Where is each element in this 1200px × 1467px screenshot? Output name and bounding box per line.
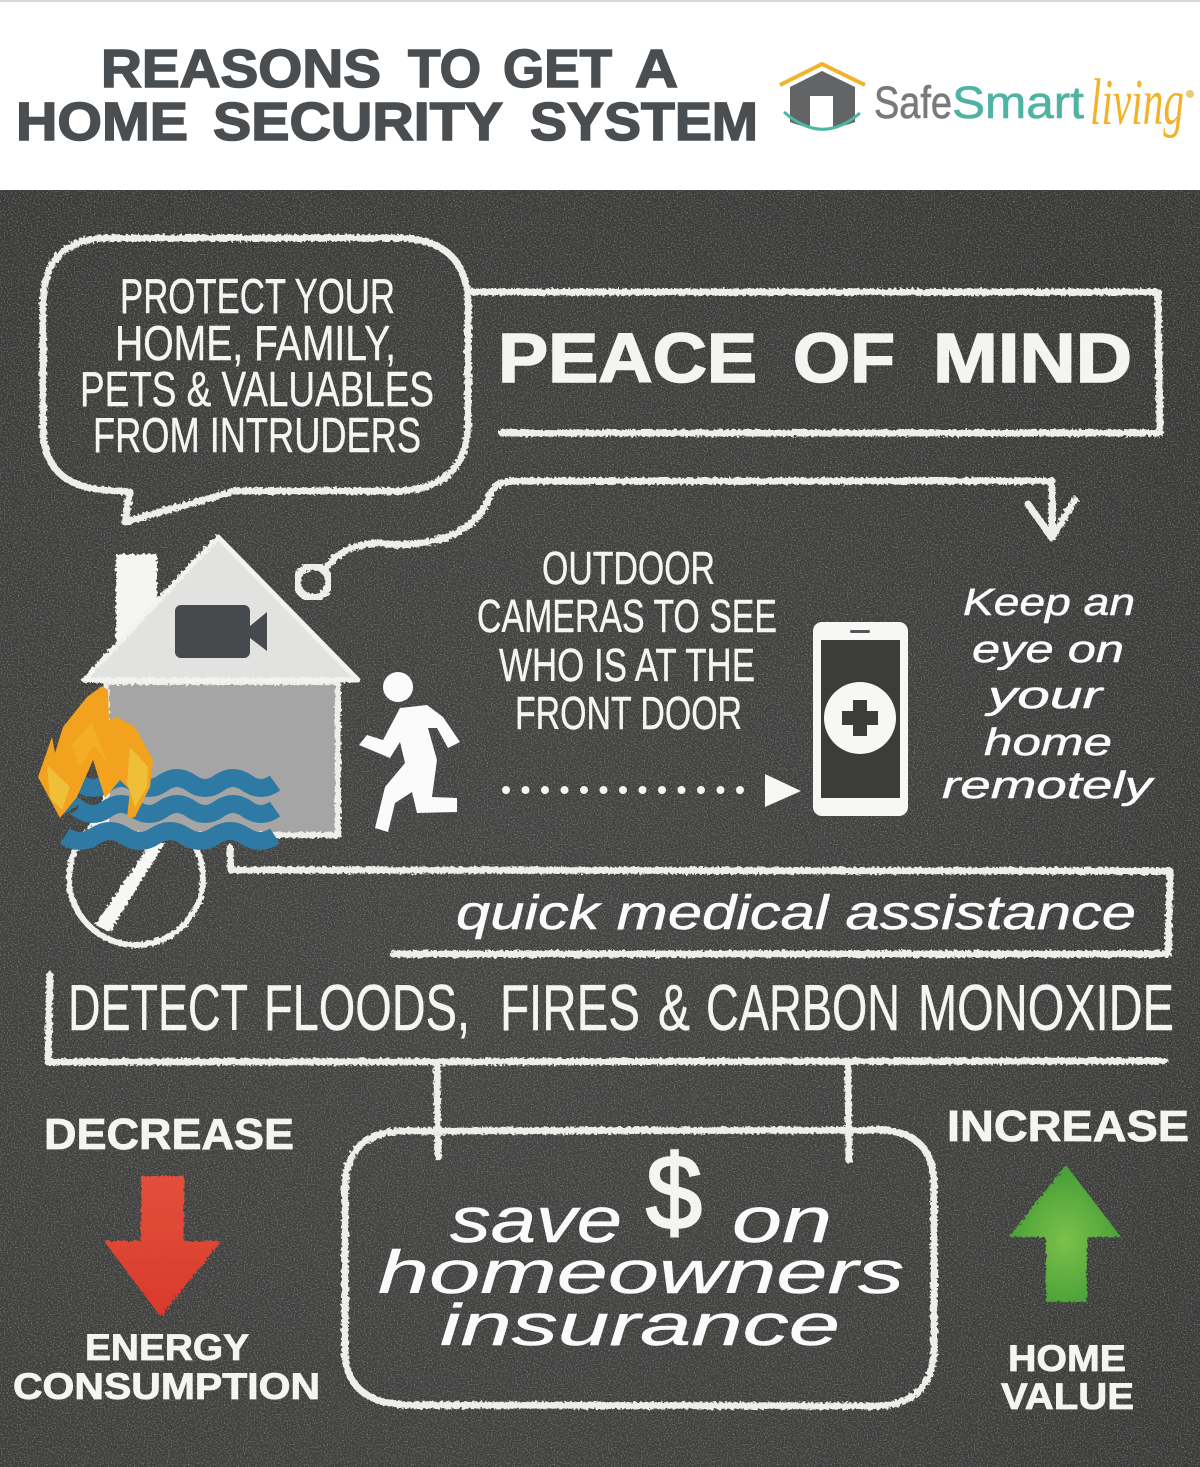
title: A (635, 39, 678, 99)
text: keep an eye on your home remotely: eye on (972, 629, 1124, 671)
panel: quick medical assistance (230, 848, 1170, 954)
text: detect floods, fires and carbon monoxide: & (658, 971, 690, 1044)
title: HOME (16, 92, 188, 152)
text: keep an eye on your home remotely: Keep an (963, 582, 1135, 624)
text: protect your home: HOME, FAMILY, (115, 317, 396, 371)
top strip (0, 0, 1200, 190)
text: detect floods, fires and carbon monoxide (68, 971, 1174, 1044)
text: detect floods, fires and carbon monoxide: FLOODS, (264, 971, 470, 1044)
title: SYSTEM (530, 92, 758, 152)
text: protect your home (80, 270, 434, 463)
text: detect floods, fires and carbon monoxide: DETECT (68, 971, 248, 1044)
icon: running person (359, 672, 460, 832)
text: outdoor cameras: WHO IS AT THE (499, 639, 755, 691)
text: outdoor cameras (477, 542, 777, 739)
panel: peace of mind (472, 292, 1160, 433)
icon: red arrow (104, 1176, 221, 1317)
text: energy consumption: ENERGY (85, 1327, 249, 1368)
title: REASONS (101, 39, 381, 99)
icon: phone (813, 622, 908, 816)
heading: increase: INCREASE (947, 1102, 1189, 1151)
text: outdoor cameras: OUTDOOR (542, 542, 715, 594)
title: SECURITY (213, 92, 503, 152)
text: outdoor cameras: FRONT DOOR (515, 687, 742, 739)
text: quick medical assistance: quick medical assistance (456, 887, 1136, 940)
text: protect your home: PETS & VALUABLES (80, 363, 434, 417)
text: keep an eye on your home remotely: your (983, 675, 1104, 717)
icon: house (84, 537, 358, 835)
text: keep an eye on your home remotely: remotely (942, 765, 1155, 807)
text: home value: VALUE (1001, 1376, 1134, 1417)
heading: peace of mind: PEACE (498, 319, 757, 397)
icon: water waves (65, 778, 275, 841)
panel: save on homeowners insurance (345, 1065, 934, 1406)
logo: SafeSmart living: Smart (952, 77, 1085, 128)
title: TO (408, 39, 481, 99)
logo: SafeSmart living (780, 64, 1194, 139)
text: save on homeowners insurance (378, 1184, 904, 1358)
logo: SafeSmart living: Safe (874, 77, 952, 128)
text: home value: HOME (1008, 1338, 1126, 1379)
text: energy consumption: CONSUMPTION (13, 1366, 320, 1407)
text: protect your home: FROM INTRUDERS (93, 409, 421, 463)
icon: logo house (780, 64, 865, 129)
text: energy consumption (13, 1327, 320, 1407)
icon: no-symbol circle behind house (69, 811, 203, 945)
text: save on homeowners insurance: on (732, 1184, 832, 1256)
text: save on homeowners insurance: insurance (440, 1293, 840, 1358)
heading: peace of mind (498, 319, 1132, 397)
heading: peace of mind: OF (793, 319, 895, 397)
arrow: dotted to phone (506, 774, 801, 807)
text: protect your home: PROTECT YOUR (120, 270, 395, 324)
text: save on homeowners insurance: homeowners (378, 1239, 904, 1306)
panel: speech bubble (43, 238, 468, 522)
title: GET (503, 39, 612, 99)
text: save on homeowners insurance: save (450, 1184, 622, 1256)
heading: peace of mind: MIND (933, 319, 1132, 397)
icon: camera (175, 605, 267, 658)
text: detect floods, fires and carbon monoxide: CARBON (706, 971, 900, 1044)
text: detect floods, fires and carbon monoxide: FIRES (500, 971, 640, 1044)
panel: increase home value (947, 1102, 1189, 1417)
text: keep an eye on your home remotely (942, 582, 1155, 807)
icon: green arrow (1009, 1165, 1121, 1302)
arrow: curved connector to phone text (297, 481, 1075, 598)
text: dollar sign: $ (646, 1134, 702, 1252)
heading: decrease: DECREASE (44, 1110, 294, 1159)
text: home value (1001, 1338, 1134, 1417)
panel: decrease energy consumption (13, 1110, 320, 1407)
icon: flames (38, 686, 153, 818)
text: keep an eye on your home remotely: home (984, 722, 1112, 764)
panel: detect floods (48, 971, 1174, 1062)
title (16, 39, 758, 152)
text: outdoor cameras: CAMERAS TO SEE (477, 590, 777, 642)
